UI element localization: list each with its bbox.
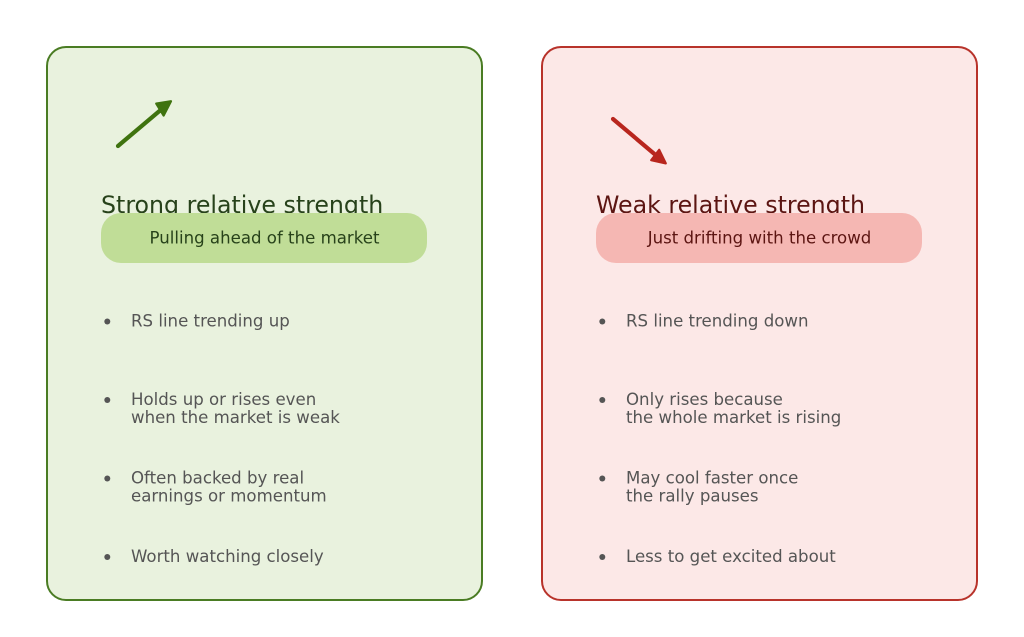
panel background: weak (542, 47, 977, 600)
panel background: strong (47, 47, 482, 600)
bullet: only rises: the whole market is rising (626, 408, 841, 427)
bullet: holds up: Holds up or rises even (131, 390, 316, 409)
bullet: often backed: earnings or momentum (131, 486, 327, 506)
bullet: may cool: May cool faster once (626, 468, 798, 488)
pill: weak tagline: Just drifting with the crowd (647, 228, 871, 248)
icon: up arrow (118, 101, 171, 146)
bullet list: strong (104, 312, 340, 566)
panel: strong relative strength (47, 47, 482, 600)
bullet: holds up (104, 390, 340, 427)
pill: strong tagline: Pulling ahead of the market (150, 228, 380, 248)
bullet: only rises: Only rises because (626, 390, 783, 409)
pill: weak tagline (596, 213, 922, 263)
heading: weak: Weak relative strength (596, 191, 865, 219)
pill: strong tagline (101, 213, 427, 263)
bullet: worth watching: Worth watching closely (131, 547, 324, 566)
heading: strong: Strong relative strength (101, 191, 383, 219)
bullet: RS line trending up: RS line trending up (131, 312, 290, 330)
bullet: holds up: when the market is weak (131, 408, 340, 427)
bullet: often backed: Often backed by real (131, 468, 304, 488)
bullet: may cool (599, 468, 798, 506)
bullet: may cool: the rally pauses (626, 486, 759, 506)
bullet: often backed (104, 468, 327, 506)
icon: down arrow (613, 119, 666, 163)
bullet: only rises (599, 390, 841, 427)
bullet: RS line trending down: RS line trending down (626, 312, 808, 330)
panel: weak relative strength (542, 47, 977, 600)
bullet list: weak (599, 312, 841, 566)
bullet: less to get excited: Less to get excited about (626, 547, 836, 566)
